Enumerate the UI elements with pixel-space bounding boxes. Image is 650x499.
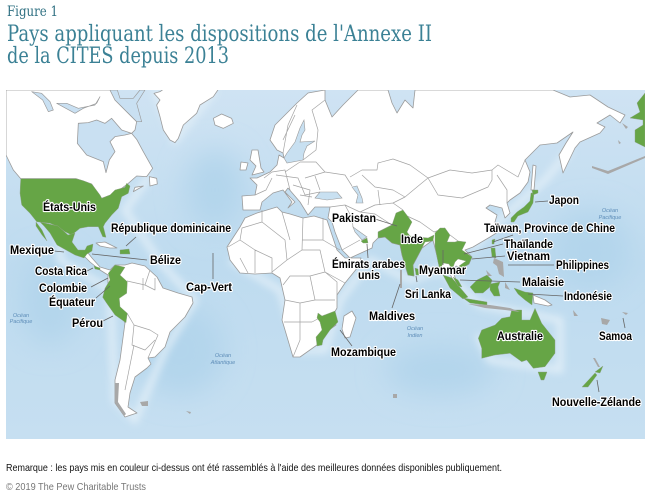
country labels: Bélize bbox=[150, 255, 181, 267]
Colombia, Ecuador, Peru bbox=[103, 265, 127, 323]
ocean labels: Indien bbox=[408, 333, 422, 339]
Pakistan and India bbox=[378, 210, 434, 276]
Malaysia peninsula bbox=[453, 277, 462, 287]
title bbox=[7, 22, 432, 69]
country labels: Mozambique bbox=[331, 347, 396, 359]
Japan bbox=[511, 193, 534, 222]
country labels: Malaisie bbox=[522, 277, 564, 289]
leader lines bbox=[54, 201, 625, 392]
land: Africa and Madagascar bbox=[227, 207, 361, 357]
country labels: Équateur bbox=[49, 296, 95, 309]
country labels: Mexique bbox=[10, 245, 54, 257]
world map bbox=[6, 89, 645, 439]
country labels: Pakistan bbox=[332, 213, 376, 225]
United Arab Emirates bbox=[361, 238, 368, 243]
country labels: Colombie bbox=[39, 283, 87, 295]
south islands bbox=[140, 401, 148, 406]
New Zealand bbox=[582, 373, 597, 387]
title: Pays appliquant les dispositions de l'Annexe II bbox=[7, 22, 432, 47]
land: Eurasia bbox=[240, 90, 625, 285]
Mozambique bbox=[316, 311, 338, 346]
Sulawesi bbox=[490, 282, 500, 296]
land: Central and South America bbox=[83, 242, 193, 417]
country labels: République dominicaine bbox=[111, 223, 231, 235]
country labels: Japon bbox=[549, 195, 579, 207]
country labels: Samoa bbox=[599, 331, 633, 343]
ocean labels bbox=[10, 208, 621, 366]
Tasmania bbox=[538, 372, 547, 380]
ocean labels: Pacifique bbox=[599, 215, 621, 221]
country labels: Nouvelle-Zélande bbox=[552, 397, 641, 409]
note: Remarque : les pays mis en couleur ci-dessus ont été rassemblés à l'aide des meilleures données disponibles publiquement. bbox=[6, 462, 502, 474]
country labels: Taïwan, Province de Chine bbox=[484, 223, 615, 235]
country borders bbox=[125, 100, 525, 390]
Alaska at right edge bbox=[630, 93, 645, 147]
Java and Lesser Sunda bbox=[463, 298, 487, 305]
highlighted countries bbox=[20, 93, 645, 387]
title: de la CITES depuis 2013 bbox=[7, 44, 229, 69]
country labels: Costa Rica bbox=[35, 266, 88, 278]
Luzon bbox=[491, 248, 496, 258]
ocean labels: Océan bbox=[602, 208, 618, 214]
Mexico bbox=[40, 222, 93, 258]
country labels: Thaïlande bbox=[504, 239, 553, 251]
Costa Rica bbox=[94, 266, 100, 270]
Aleutians bbox=[592, 156, 645, 174]
United States bbox=[20, 179, 130, 237]
Dominican Republic bbox=[120, 249, 130, 254]
country labels: Sri Lanka bbox=[405, 289, 452, 301]
country labels: Maldives bbox=[369, 311, 415, 323]
Sri Lanka bbox=[415, 268, 419, 275]
country labels: Myanmar bbox=[419, 265, 466, 277]
Sumatra bbox=[443, 275, 468, 299]
country labels: Philippines bbox=[556, 260, 609, 272]
Taiwan bbox=[492, 239, 495, 244]
New Guinea west bbox=[514, 288, 533, 305]
country labels: Cap-Vert bbox=[186, 282, 232, 294]
Baja California bbox=[36, 222, 47, 241]
ocean labels: Océan bbox=[215, 353, 231, 359]
Borneo bbox=[470, 275, 492, 293]
country labels bbox=[10, 195, 641, 409]
country labels: unis bbox=[358, 270, 380, 282]
country labels: États-Unis bbox=[43, 201, 96, 214]
seas and lakes bbox=[284, 120, 367, 240]
ocean labels: Atlantique bbox=[210, 360, 235, 366]
country labels: Inde bbox=[401, 234, 423, 246]
country labels: Pérou bbox=[72, 318, 103, 330]
copyright: © 2019 The Pew Charitable Trusts bbox=[6, 481, 146, 493]
ocean labels: Pacifique bbox=[10, 319, 32, 325]
Papua New Guinea bbox=[533, 295, 552, 306]
figure number: Figure 1 bbox=[7, 4, 58, 20]
Maldives bbox=[400, 270, 402, 288]
country labels: Indonésie bbox=[564, 291, 612, 303]
Myanmar, Thailand, Laos, Vietnam bbox=[435, 228, 472, 270]
Philippines bbox=[493, 258, 504, 277]
country labels: Australie bbox=[497, 331, 543, 343]
land: North America and Greenland bbox=[6, 89, 233, 198]
ocean labels: Océan bbox=[407, 326, 423, 332]
ocean labels: Océan bbox=[13, 313, 29, 319]
Australia bbox=[478, 308, 555, 368]
islands and archipelagos bbox=[115, 123, 645, 416]
country labels: Émirats arabes bbox=[332, 258, 405, 271]
country labels: Vietnam bbox=[507, 251, 550, 263]
